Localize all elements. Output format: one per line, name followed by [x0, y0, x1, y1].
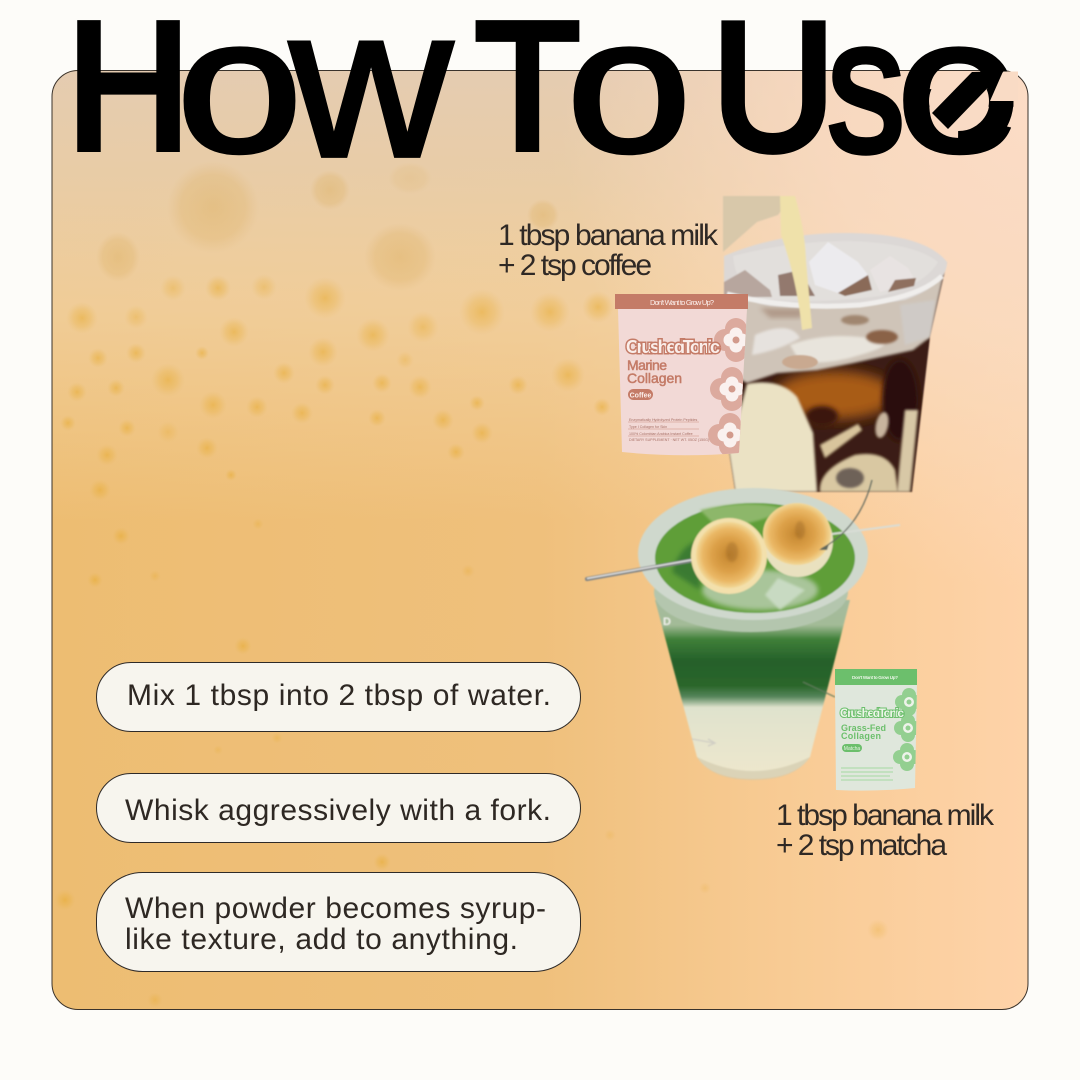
icon: marine collagen pouch: Collagen	[627, 370, 682, 386]
icon: marine collagen pouch: CrushedTonic	[626, 337, 720, 357]
step 3 pill: When powder becomes syrup-	[125, 892, 546, 925]
photo leftover backdrop	[723, 196, 792, 252]
glass rim	[638, 488, 868, 620]
label: banana milk + coffee	[498, 219, 719, 282]
label: banana milk + coffee: 1 tbsp banana milk	[498, 219, 719, 252]
small arrows	[821, 480, 872, 549]
title letter e: slanted bar detail	[929, 71, 1018, 143]
icon: grass-fed collagen pouch: Don't Want to Grow Up?	[852, 675, 898, 680]
panel: banana milk bubbles background	[52, 70, 1028, 1010]
icon: marine collagen pouch: Type I Collagen for Skin	[629, 425, 667, 429]
step 3 pill: like texture, add to anything.	[125, 923, 518, 956]
matcha surface	[655, 503, 855, 613]
icon: marine collagen pouch: 100% Colombian Arabica Instant Coffee	[629, 432, 693, 436]
label: banana milk + coffee: + 2 tsp coffee	[498, 249, 652, 282]
step 3 pill	[96, 872, 580, 972]
step 2 pill	[96, 774, 580, 842]
milk pour	[780, 196, 812, 330]
icon: marine collagen pouch: Don't Want to Grow Up?	[650, 298, 714, 307]
icon: marine collagen pouch: Marine	[627, 357, 667, 373]
foam	[743, 274, 944, 384]
icon: grass-fed collagen pouch: Matcha	[844, 746, 860, 752]
drink: iced matcha with banana	[587, 480, 900, 780]
step 1 pill	[96, 662, 580, 732]
cream swirl lower left	[729, 383, 817, 492]
icon: grass-fed collagen pouch	[835, 669, 923, 791]
label: banana milk + matcha: 1 tbsp banana milk	[776, 799, 995, 832]
skewer	[587, 560, 694, 579]
drink: iced matcha with banana: D	[663, 616, 671, 628]
step 2 pill: Whisk aggressively with a fork.	[125, 794, 551, 827]
icon: marine collagen pouch: Coffee	[630, 392, 651, 400]
cup rim and ice	[724, 233, 947, 308]
icon: grass-fed collagen pouch: Collagen	[841, 731, 881, 741]
drink: iced coffee with banana milk	[720, 196, 950, 495]
icon: banana slices	[691, 503, 833, 594]
icon: grass-fed collagen pouch: CrushedTonic	[840, 706, 904, 720]
icon: pouch flowers	[893, 688, 917, 771]
icon: grass-fed collagen pouch: Grass-Fed	[841, 723, 886, 733]
icon: pouch flowers	[708, 318, 746, 454]
front rim band	[654, 552, 848, 632]
label: banana milk + matcha: + 2 tsp matcha	[776, 829, 947, 862]
step 1 pill: Mix 1 tbsp into 2 tbsp of water.	[127, 679, 551, 712]
title: How To Use	[67, 0, 1021, 202]
icon: marine collagen pouch	[615, 294, 758, 457]
icon: marine collagen pouch: Enzymatically Hydrolyzed Protein Peptides	[629, 418, 698, 422]
label: banana milk + matcha	[776, 799, 995, 862]
icon: marine collagen pouch: DIETARY SUPPLEMENT · NET WT. 05OZ (150G)	[629, 438, 709, 442]
